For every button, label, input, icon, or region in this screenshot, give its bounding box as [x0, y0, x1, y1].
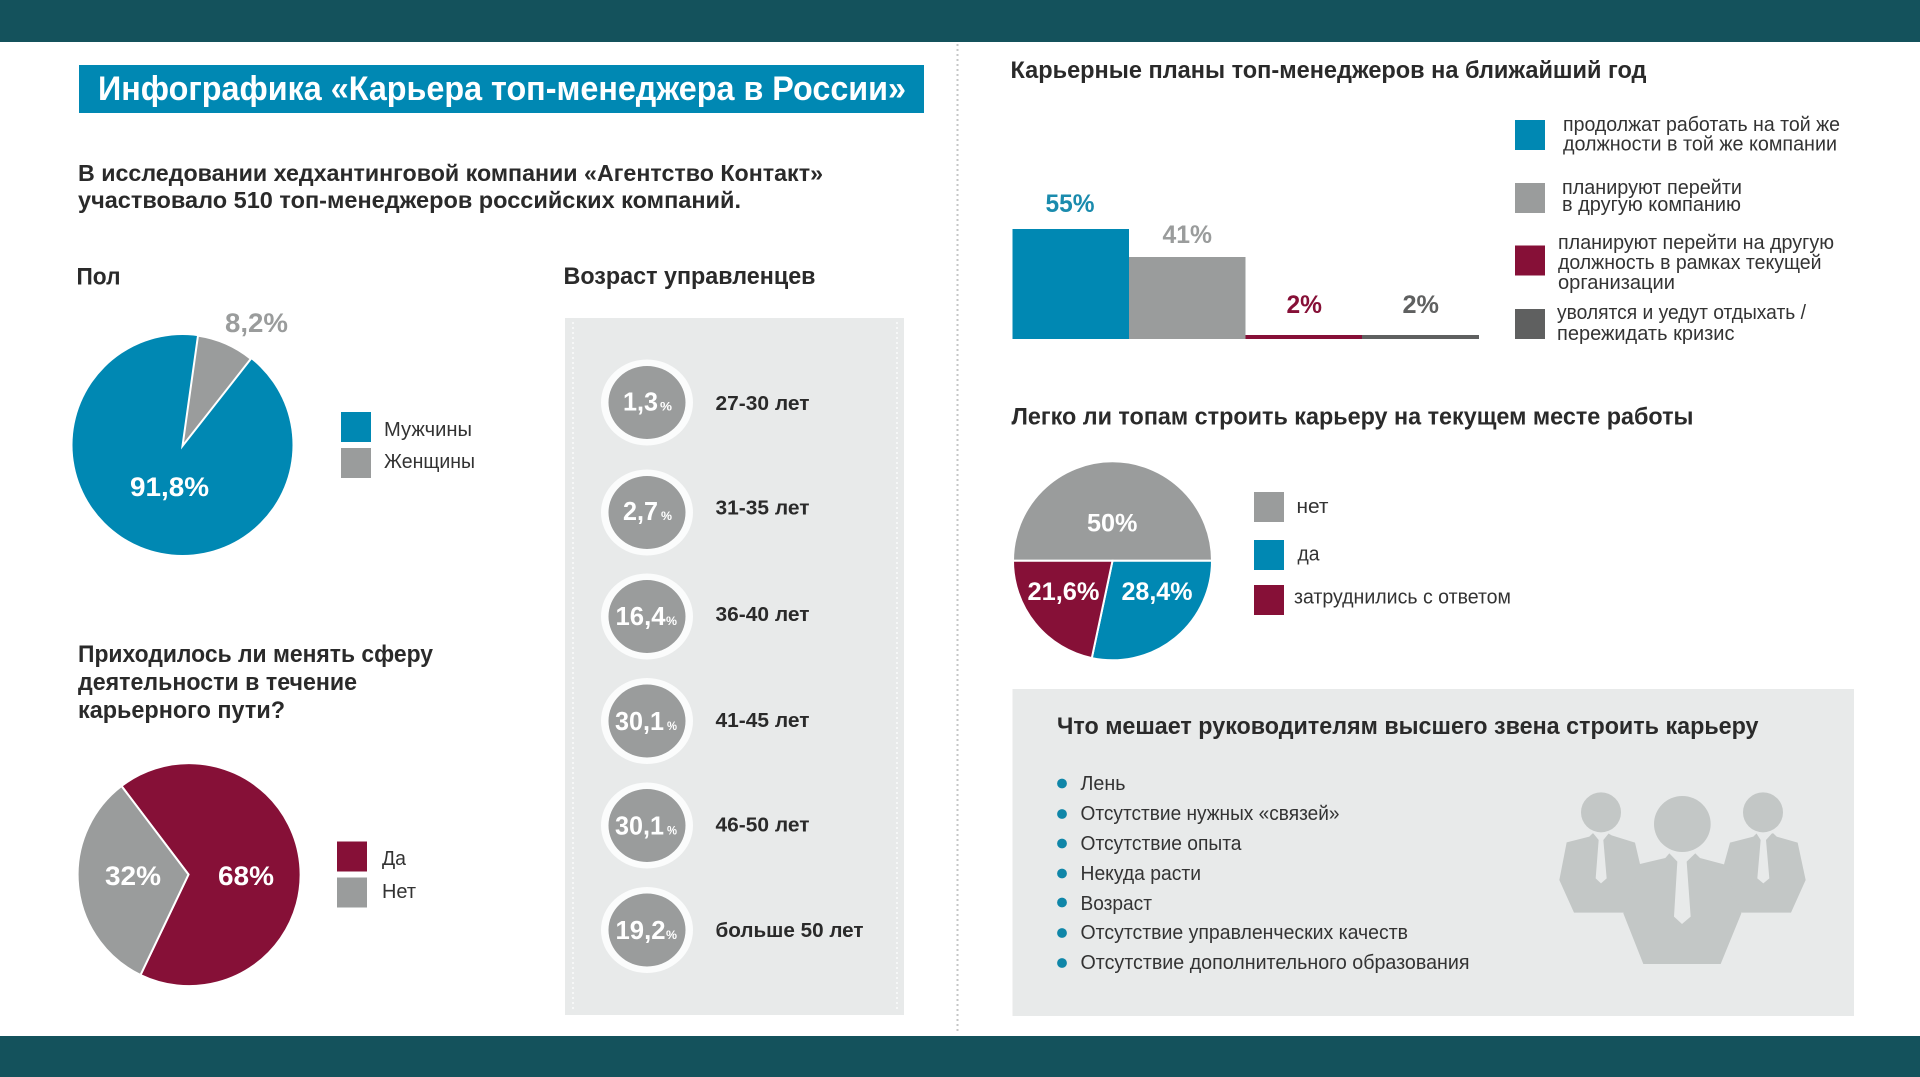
age row 27-30: 27-30 лет [716, 392, 810, 415]
pie chart: gender: 8,2% [225, 308, 288, 338]
pie chart: change of field: 32% [105, 861, 161, 891]
intro text: участвовало 510 топ-менеджеров российских компаний. [78, 187, 741, 213]
heading: change of field: Приходилось ли менять сферу [78, 641, 433, 668]
heading: age: Возраст управленцев [564, 263, 816, 290]
bullet list [1057, 772, 1470, 974]
age row over 50: 19,2 [616, 915, 666, 945]
legend: career plans: организации [1558, 271, 1675, 294]
bar chart: career plans: 55% [1046, 190, 1094, 218]
panel heading: Что мешает руководителям высшего звена строить карьеру [1057, 713, 1759, 740]
age row over 50: % [666, 928, 677, 942]
age row over 50: больше 50 лет [716, 919, 864, 942]
legend: career plans: в другую компанию [1562, 193, 1741, 216]
age row 36-40: 16,4 [616, 601, 666, 631]
pie chart: gender: 91,8% [130, 472, 209, 502]
legend: career plans: уволятся и уедут отдыхать / [1557, 301, 1806, 324]
legend: change of field: Нет [382, 880, 417, 903]
pie chart: ease of career: 21,6% [1028, 578, 1100, 606]
age row 27-30: % [660, 400, 672, 414]
legend: gender: Мужчины [384, 418, 472, 441]
age row 31-35: 31-35 лет [716, 496, 810, 520]
age row 46-50: % [667, 824, 677, 838]
age row 36-40: % [666, 614, 677, 628]
title banner: Инфографика «Карьера топ-менеджера в России» [98, 70, 906, 108]
bar chart: career plans: 41% [1162, 221, 1212, 249]
heading: change of field: деятельности в течение [78, 669, 357, 696]
bullet list: Лень [1080, 772, 1126, 795]
bar chart: career plans [1012, 190, 1479, 339]
legend: career plans [1515, 113, 1840, 345]
legend: change of field [337, 842, 417, 908]
top band [0, 0, 1920, 42]
age row 36-40 [601, 574, 810, 660]
legend: ease of career: да [1298, 542, 1320, 566]
legend: gender: Женщины [384, 450, 475, 473]
age row 41-45: % [667, 719, 677, 733]
age row 46-50: 46-50 лет [716, 814, 810, 836]
bar chart: career plans: 2% [1286, 291, 1322, 319]
icon: three managers [1559, 792, 1806, 964]
legend: career plans: продолжат работать на той же [1563, 113, 1840, 136]
legend: change of field: Да [382, 847, 407, 870]
legend: career plans: пережидать кризис [1557, 322, 1734, 345]
pie chart: ease of career: 28,4% [1122, 578, 1192, 606]
panel: career obstacles [1012, 689, 1854, 1016]
age row 41-45 [601, 678, 810, 764]
heading: career plans: Карьерные планы топ-менеджеров на ближайший год [1010, 57, 1647, 84]
age row 27-30 [601, 360, 810, 446]
age row 41-45: 30,1 [615, 706, 664, 736]
age row 46-50 [601, 782, 810, 868]
heading: change of field: карьерного пути? [78, 697, 285, 724]
legend: ease of career: нет [1296, 495, 1329, 518]
pie chart: ease of career [1013, 461, 1212, 660]
bar chart: career plans: 2% [1402, 291, 1439, 319]
heading: gender: Пол [76, 264, 120, 290]
legend: ease of career [1254, 492, 1511, 615]
legend: career plans: планируют перейти [1562, 176, 1742, 199]
heading: ease of career: Легко ли топам строить карьеру на текущем месте работы [1012, 404, 1694, 430]
pie chart: ease of career: 50% [1087, 510, 1138, 538]
bullet list: Возраст [1080, 892, 1153, 915]
panel: age [565, 318, 904, 1015]
pie chart: change of field: 68% [218, 861, 274, 891]
legend: ease of career: затруднились с ответом [1294, 586, 1511, 608]
bullet list: Отсутствие дополнительного образования [1080, 951, 1470, 974]
bullet list: Отсутствие опыта [1080, 832, 1242, 855]
age row 31-35 [601, 470, 810, 556]
bullet list: Некуда расти [1080, 862, 1201, 885]
age row 31-35: 2,7 [623, 496, 658, 526]
pie chart: change of field [78, 763, 301, 986]
age row over 50 [601, 887, 864, 973]
intro text: В исследовании хедхантинговой компании «Агентство Контакт» [78, 160, 823, 186]
age row 31-35: % [661, 509, 672, 523]
legend: career plans: должность в рамках текущей [1558, 251, 1822, 274]
heading: change of field [78, 641, 433, 724]
bullet list: Отсутствие управленческих качеств [1080, 921, 1408, 944]
age row 41-45: 41-45 лет [716, 709, 810, 732]
age row 36-40: 36-40 лет [716, 603, 810, 626]
legend: gender [341, 412, 475, 478]
legend: career plans: должности в той же компании [1563, 132, 1837, 156]
age row 27-30: 1,3 [623, 386, 658, 416]
age row 46-50: 30,1 [615, 810, 664, 840]
legend: career plans: планируют перейти на другую [1558, 231, 1834, 254]
pie chart: gender [72, 308, 292, 555]
intro text [78, 160, 823, 213]
bottom band [0, 1036, 1920, 1077]
bullet list: Отсутствие нужных «связей» [1080, 802, 1340, 825]
